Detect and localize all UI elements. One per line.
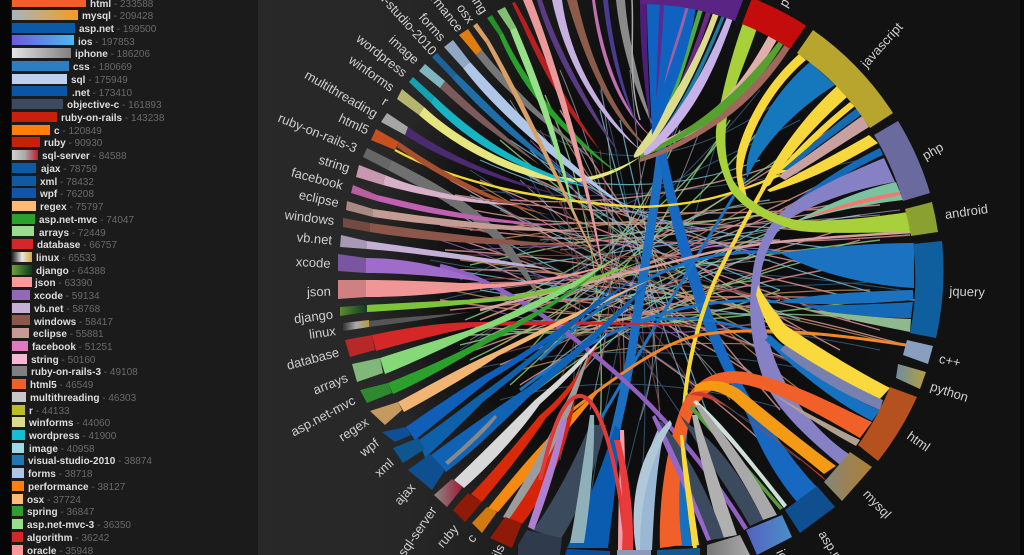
ribbon: javascript yellow edge bbox=[736, 54, 806, 207]
ribbon: forms bbox=[463, 62, 630, 210]
ribbon: javascript blue bbox=[746, 62, 835, 178]
ribbon: top blue wedge bbox=[647, 3, 696, 135]
legend row: json bbox=[12, 277, 93, 289]
ring segment: ruby-on-rails bbox=[490, 517, 522, 548]
legend row: forms: forms - 38718 bbox=[28, 469, 93, 480]
ribbon: php blue bbox=[772, 148, 883, 222]
label: vb.net: vb.net bbox=[296, 230, 333, 248]
legend row: ruby-on-rails: ruby-on-rails - 143238 bbox=[61, 113, 165, 124]
ribbon: algorithm bbox=[522, 22, 600, 150]
ribbon: grey beside rails bbox=[503, 350, 590, 521]
ring segment: performance bbox=[459, 29, 482, 55]
legend row: regex: regex - 75797 bbox=[40, 202, 104, 213]
legend row: asp.net-mvc-3: asp.net-mvc-3 - 36350 bbox=[27, 520, 131, 531]
ring segment: string bbox=[356, 165, 385, 185]
ribbon: html thin strands bbox=[760, 385, 860, 446]
ring segment: xcode bbox=[338, 254, 366, 273]
legend row: .net bbox=[12, 86, 132, 99]
legend row: ios bbox=[12, 35, 135, 48]
legend row: iphone: iphone - 186206 bbox=[75, 49, 150, 60]
ring segment: android bbox=[905, 202, 938, 236]
label: multithreading: multithreading bbox=[302, 67, 380, 121]
ribbon: eclipse bbox=[373, 209, 600, 232]
ring segment: sql bbox=[617, 550, 651, 555]
ribbon: jquery pale strands bbox=[800, 308, 911, 332]
ring segment: iphone bbox=[707, 535, 750, 555]
label: r: r bbox=[380, 94, 392, 109]
chart: tag labels around ring bbox=[276, 0, 989, 555]
ribbon: brown bbox=[567, 0, 650, 150]
legend row: ruby bbox=[12, 137, 103, 149]
ring segment: facebook bbox=[351, 185, 377, 201]
ribbon: php lavender bbox=[750, 158, 895, 465]
ring segment: python bbox=[896, 364, 926, 389]
ribbon: red segment pink strands bbox=[640, 33, 778, 155]
legend row: ajax: ajax - 78759 bbox=[41, 164, 98, 175]
legend row: regex bbox=[12, 201, 104, 213]
ring segment: spring bbox=[487, 15, 503, 35]
chart: top-left ribbon fan bbox=[367, 0, 655, 300]
ribbon: thin purple bbox=[537, 0, 620, 155]
ring segment: json bbox=[338, 280, 366, 299]
legend row: image: image - 40958 bbox=[29, 444, 95, 455]
legend row: django: django - 64388 bbox=[36, 266, 106, 277]
chord: yellow javascript to css bbox=[683, 92, 842, 548]
legend row: sql: sql - 175949 bbox=[71, 75, 128, 86]
ring segment: .net bbox=[565, 549, 610, 555]
legend row: ruby: ruby - 90930 bbox=[44, 138, 103, 149]
ring segment: sql-server bbox=[434, 479, 463, 507]
ring segment: c bbox=[472, 507, 497, 533]
legend row: iphone bbox=[12, 48, 150, 60]
chart: outer ring segments bbox=[338, 0, 943, 555]
legend row: windows: windows - 58417 bbox=[33, 317, 113, 328]
ribbon: jquery wedge 1 bbox=[780, 243, 914, 288]
ribbon: winforms bbox=[419, 107, 640, 182]
label: facebook: facebook bbox=[290, 165, 345, 193]
legend row: vb.net bbox=[12, 303, 101, 315]
ribbon: ios slate bbox=[680, 415, 763, 526]
ring segment: php bbox=[874, 121, 930, 201]
ribbon: php red strand bbox=[805, 192, 901, 218]
ribbon: xcode bbox=[366, 258, 482, 282]
ribbon: facebook bbox=[377, 195, 560, 225]
ribbon: top teal bbox=[655, 15, 725, 140]
ribbon: top pale yellow bbox=[634, 13, 719, 158]
ribbon: visual-studio-2010 bbox=[452, 73, 590, 190]
chord: blue streak from javascript bbox=[600, 178, 745, 420]
ribbon: grey thin bbox=[632, 0, 640, 120]
ribbon: html5 brown bbox=[397, 142, 550, 215]
legend row: linux bbox=[12, 252, 96, 264]
ribbon: top pink streak bbox=[664, 6, 689, 85]
legend row: eclipse: eclipse - 55881 bbox=[33, 329, 104, 340]
legend row: vb.net: vb.net - 58768 bbox=[34, 304, 101, 315]
ribbon: asp.net-mvc bbox=[388, 270, 600, 394]
legend row: database bbox=[12, 239, 117, 251]
label: osx: osx bbox=[454, 1, 478, 26]
ribbon: ios grey bbox=[695, 405, 777, 520]
ribbon: css blue bbox=[675, 395, 692, 546]
ribbon: html yellow bbox=[756, 285, 890, 401]
label: winforms: winforms bbox=[345, 52, 398, 95]
ribbon: thin pink bbox=[618, 430, 625, 550]
legend row: windows bbox=[12, 315, 113, 328]
ring segment: asp.net-mvc bbox=[360, 383, 392, 403]
ribbon: top green bbox=[662, 10, 703, 115]
label: string: string bbox=[317, 152, 352, 176]
ring segment: red bbox=[742, 0, 806, 49]
label: django: django bbox=[293, 307, 334, 326]
label: c++: c++ bbox=[938, 351, 962, 370]
chord: blue top to .net band bbox=[612, 135, 663, 445]
legend row: objective-c: objective-c - 161893 bbox=[67, 100, 162, 111]
legend row: ruby-on-rails bbox=[12, 112, 165, 124]
ring segment: linux bbox=[343, 320, 369, 331]
legend row: html bbox=[12, 0, 154, 10]
ribbon: string bbox=[383, 175, 520, 205]
panel: tag frequency legend bbox=[12, 0, 165, 555]
label: mysql: mysql bbox=[860, 486, 894, 522]
legend row: algorithm: algorithm - 36242 bbox=[27, 533, 110, 544]
label: eclipse: eclipse bbox=[298, 187, 340, 210]
chord: pink from android across centre bbox=[480, 232, 912, 310]
chord: blue top to asp.net bbox=[655, 132, 817, 502]
ribbon: .net blue bbox=[567, 425, 620, 548]
ribbon: red wide foot bbox=[614, 440, 633, 550]
ribbon: red segment brown bbox=[640, 44, 790, 162]
legend row: database: database - 66757 bbox=[37, 240, 117, 251]
label: ruby: ruby bbox=[434, 521, 462, 551]
ribbon: thin pale blue chord bbox=[634, 420, 672, 550]
ribbon: top dark purple bbox=[655, 12, 711, 135]
legend row: arrays bbox=[12, 226, 106, 239]
legend row: osx: osx - 37724 bbox=[27, 495, 81, 506]
ribbon: database bbox=[372, 321, 690, 351]
ring segment: eclipse bbox=[346, 201, 373, 217]
legend row: r: r - 44133 bbox=[29, 406, 70, 417]
ring segment: arrays bbox=[352, 358, 383, 382]
ribbon: iphone slate bbox=[655, 420, 724, 540]
ribbon: performance bbox=[476, 50, 600, 165]
legend row: wpf: wpf - 76208 bbox=[39, 189, 94, 200]
legend row: xml bbox=[12, 176, 94, 188]
ribbon: javascript yellow 2 bbox=[760, 86, 847, 190]
ring segment: objective-c bbox=[518, 530, 562, 555]
ring segment: asp.net-mvc-3 bbox=[497, 7, 516, 30]
ribbon: yellow into css bbox=[680, 435, 699, 546]
ring segment: asp.net bbox=[785, 486, 835, 533]
ribbon: ruby-on-rails bbox=[509, 400, 575, 524]
ribbon: regex bbox=[398, 280, 650, 412]
ring segment: c++ bbox=[903, 340, 933, 364]
label: xcode: xcode bbox=[296, 254, 331, 271]
ring segment: winforms bbox=[397, 89, 424, 115]
ribbon: iphone purple bbox=[652, 415, 711, 541]
ribbon: php yellow bbox=[767, 135, 878, 192]
label: json: json bbox=[306, 284, 331, 299]
legend row: r bbox=[12, 405, 70, 417]
ribbon: mysql orange bbox=[694, 381, 836, 474]
chord: xcode to ios purple bbox=[440, 266, 746, 529]
label: linux: linux bbox=[308, 323, 337, 342]
ring segment: database bbox=[345, 335, 375, 357]
label: image: image bbox=[386, 32, 422, 67]
legend row: ios: ios - 197853 bbox=[78, 37, 135, 48]
ring segment: algorithm bbox=[512, 2, 526, 24]
label: jquery: jquery bbox=[948, 283, 986, 300]
ring segment: xml bbox=[393, 438, 425, 463]
ribbon: sql pale blue bbox=[636, 425, 664, 550]
ribbon: top lilac bbox=[644, 17, 733, 155]
ring segment: html bbox=[858, 387, 917, 461]
legend row: xml: xml - 78432 bbox=[40, 177, 94, 188]
ring segment: ruby bbox=[453, 493, 482, 522]
ribbon: pink-purple bbox=[592, 0, 655, 140]
legend row: spring: spring - 36847 bbox=[27, 507, 95, 518]
label: xml: xml bbox=[371, 455, 397, 480]
legend row: performance: performance - 38127 bbox=[28, 482, 126, 493]
legend row: objective-c bbox=[12, 99, 162, 111]
ribbon: multithreading bbox=[405, 127, 560, 195]
legend row: ajax bbox=[12, 163, 98, 175]
ribbon: dark purple left edge bbox=[640, 4, 651, 130]
ring segment: wpf bbox=[382, 427, 411, 442]
label: ajax: ajax bbox=[391, 480, 419, 508]
ring segment: forms bbox=[444, 40, 470, 68]
legend row: wordpress: wordpress - 41900 bbox=[28, 431, 117, 442]
chord: blue streak from jquery bbox=[520, 301, 777, 390]
legend row: winforms: winforms - 44060 bbox=[28, 418, 111, 429]
legend row: visual-studio-2010: visual-studio-2010 - 38874 bbox=[28, 456, 152, 467]
ribbon: jquery wedge 2 bbox=[777, 290, 913, 304]
legend row: linux: linux - 65533 bbox=[36, 253, 96, 264]
ring segment: html5 bbox=[371, 129, 399, 150]
legend row: html5: html5 - 46549 bbox=[30, 380, 94, 391]
ribbon: osx bbox=[486, 40, 610, 290]
ribbon: top purple streak bbox=[656, 4, 664, 100]
ribbon: iphone grey bbox=[692, 415, 737, 538]
ribbon: violet bbox=[603, 0, 640, 130]
label: ruby-on-rails-3: ruby-on-rails-3 bbox=[276, 110, 359, 155]
label: database: database bbox=[285, 344, 341, 373]
legend row: css: css - 180669 bbox=[73, 62, 132, 73]
ring segment: multithreading bbox=[381, 113, 408, 135]
ribbon: asp.net-mvc-3 bbox=[510, 27, 575, 220]
legend row: c bbox=[12, 125, 102, 137]
legend row: asp.net bbox=[12, 23, 157, 35]
chart: right side ribbons bbox=[634, 3, 914, 550]
ribbon: html orange bbox=[660, 371, 872, 548]
legend row: asp.net: asp.net - 199500 bbox=[79, 24, 157, 35]
chord: yellow html5 line bbox=[395, 150, 780, 207]
ring segment: top purple bbox=[640, 0, 745, 21]
legend row: sql bbox=[12, 74, 128, 86]
ribbon: red segment green bbox=[640, 40, 784, 158]
chord: blue streak from html bbox=[640, 318, 770, 337]
chart: left side ribbons bbox=[366, 255, 690, 550]
ring segment: osx bbox=[473, 23, 489, 43]
label: arrays: arrays bbox=[311, 370, 350, 398]
label: android: android bbox=[944, 201, 989, 222]
ribbon: django bbox=[367, 262, 640, 312]
label: html: html bbox=[904, 428, 933, 455]
ring segment: javascript bbox=[797, 30, 893, 128]
legend row: multithreading: multithreading - 46303 bbox=[30, 393, 137, 404]
legend row: sql-server: sql-server - 84588 bbox=[42, 151, 127, 162]
ribbon: red arc rails to sql bbox=[540, 396, 626, 549]
legend row: string: string - 50160 bbox=[31, 355, 96, 366]
ribbon: linux bbox=[369, 312, 470, 327]
ribbon: asp.net white strand bbox=[693, 400, 787, 508]
chart: thin cross-connecting chords bbox=[430, 70, 915, 500]
label: python: python bbox=[929, 379, 970, 405]
ring segment: ruby-on-rails-3 bbox=[363, 148, 391, 170]
chord: blue wide streaks from jquery bbox=[540, 252, 780, 360]
ring segment: django bbox=[340, 305, 367, 316]
ribbon: javascript blue 2 bbox=[782, 108, 861, 170]
ribbon: javascript pastel strands bbox=[778, 116, 869, 180]
legend row: json: json - 63390 bbox=[34, 278, 93, 289]
ring segment: mysql bbox=[824, 452, 872, 501]
ring segment: wordpress bbox=[409, 77, 434, 103]
ribbon: sql-server white bbox=[454, 330, 610, 488]
ring segment: ios bbox=[746, 515, 792, 555]
label: forms: forms bbox=[416, 10, 449, 44]
legend row: mysql bbox=[12, 10, 154, 22]
ribbon: json bbox=[366, 262, 620, 297]
ribbon: grey bbox=[616, 0, 655, 130]
ribbon: android lime bbox=[716, 23, 910, 233]
chord: orange long line c++ bbox=[562, 331, 906, 418]
ribbon: wpf bbox=[406, 275, 640, 440]
ribbon: lilac bbox=[552, 0, 640, 150]
legend row: mysql: mysql - 209428 bbox=[82, 11, 154, 22]
ring segment: vb.net bbox=[340, 235, 367, 249]
label: regex: regex bbox=[336, 414, 372, 444]
legend row: wpf bbox=[12, 188, 94, 200]
ribbon: jquery wedge 3 bbox=[800, 302, 913, 318]
legend row: ruby-on-rails-3: ruby-on-rails-3 - 49108 bbox=[31, 367, 138, 378]
legend row: sql-server bbox=[12, 150, 127, 162]
ribbon: arrays bbox=[380, 255, 620, 374]
ribbon: html lavender bbox=[780, 345, 883, 410]
ribbon: ruby-on-rails-3 bbox=[388, 160, 540, 300]
legend row: .net: .net - 173410 bbox=[72, 88, 132, 99]
label: windows: windows bbox=[283, 207, 336, 228]
ribbon: html blue bbox=[765, 335, 880, 421]
label: php: php bbox=[920, 139, 946, 163]
legend row: facebook: facebook - 51251 bbox=[32, 342, 113, 353]
legend row: xcode bbox=[12, 290, 100, 302]
ribbon: sql-server grey bbox=[445, 415, 497, 465]
label: wordpress: wordpress bbox=[353, 30, 410, 80]
ring segment: css bbox=[657, 548, 700, 555]
ribbon: mysql red strand bbox=[690, 392, 827, 482]
ribbon: ruby red bbox=[471, 340, 600, 502]
ribbon: php small strands bbox=[795, 182, 903, 222]
ribbon: c orange bbox=[488, 390, 600, 512]
legend row: asp.net-mvc: asp.net-mvc - 74047 bbox=[39, 215, 134, 226]
ring segment: regex bbox=[370, 402, 402, 425]
legend row: c: c - 120849 bbox=[54, 126, 102, 137]
ribbon: spring bbox=[499, 33, 620, 175]
ribbon: lilac to objective-c bbox=[528, 418, 567, 530]
ring segment: jquery bbox=[910, 241, 943, 338]
ribbon: asp.net green strand bbox=[689, 405, 783, 510]
ribbon: objective-c bbox=[533, 425, 606, 540]
chart: central chords bbox=[395, 92, 912, 548]
ribbon: windows bbox=[370, 223, 580, 245]
legend row: django bbox=[12, 265, 106, 277]
legend row: xcode: xcode - 59134 bbox=[34, 291, 100, 302]
ribbon: image bbox=[440, 81, 540, 165]
label: javascript: javascript bbox=[857, 19, 906, 71]
ribbon: white/colour strands bbox=[570, 415, 594, 543]
label: html5: html5 bbox=[336, 110, 371, 137]
ribbon: xml bbox=[419, 280, 620, 458]
ribbon: wordpress bbox=[431, 96, 600, 190]
ring segment: windows bbox=[343, 218, 370, 232]
label: wpf: wpf bbox=[356, 435, 382, 460]
label: asp.net-mvc: asp.net-mvc bbox=[288, 393, 358, 439]
ribbon: oracle bbox=[523, 0, 606, 290]
ribbon: vb.net bbox=[367, 241, 560, 270]
ring segment: image bbox=[419, 64, 445, 88]
ribbon: javascript yellow 3 bbox=[775, 102, 855, 175]
ribbon: ajax bbox=[431, 280, 650, 472]
ring segment: ajax bbox=[408, 454, 445, 490]
legend row: arrays: arrays - 72449 bbox=[39, 228, 106, 239]
label: c: c bbox=[464, 530, 480, 545]
legend row: css bbox=[12, 61, 132, 73]
ring segment: visual-studio-2010 bbox=[432, 53, 456, 78]
